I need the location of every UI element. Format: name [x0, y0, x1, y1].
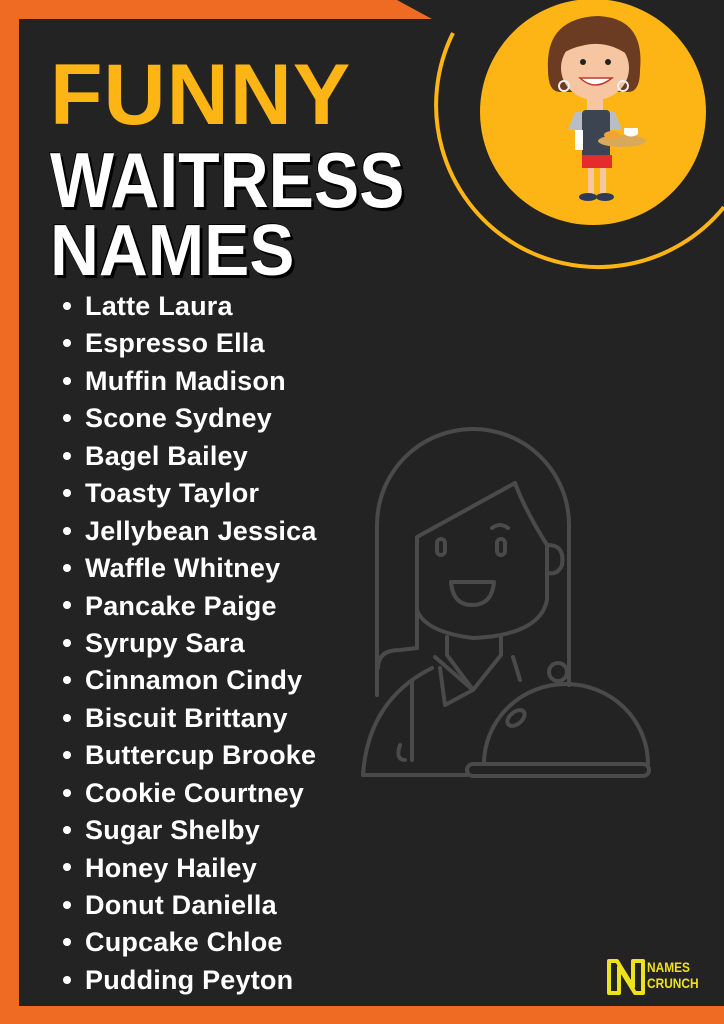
name list: Pancake Paige — [85, 590, 277, 620]
name list: Cinnamon Cindy — [85, 665, 302, 695]
name list: Buttercup Brooke — [85, 740, 316, 770]
icon: waitress cartoon — [548, 16, 646, 201]
name list: Honey Hailey — [85, 853, 257, 883]
name list — [63, 291, 317, 995]
name list: Muffin Madison — [85, 366, 286, 396]
name list: Syrupy Sara — [85, 628, 245, 658]
name list: Espresso Ella — [85, 328, 265, 358]
text: NAMES — [50, 211, 294, 291]
name list: Bagel Bailey — [85, 441, 248, 471]
name list: Cookie Courtney — [85, 778, 304, 808]
logo: names crunch: CRUNCH — [647, 975, 699, 991]
text: WAITRESS — [50, 136, 404, 224]
decorative ring and portrait circle — [434, 0, 724, 270]
name list: Jellybean Jessica — [85, 516, 317, 546]
name list: Scone Sydney — [85, 403, 272, 433]
name list: Latte Laura — [85, 291, 233, 321]
logo: names crunch: NAMES — [647, 959, 690, 975]
name list: Biscuit Brittany — [85, 703, 288, 733]
text: FUNNY — [50, 47, 351, 143]
logo: names crunch — [607, 959, 699, 995]
name list: Donut Daniella — [85, 890, 277, 920]
name list: Cupcake Chloe — [85, 927, 283, 957]
title — [49, 47, 404, 291]
name list: Pudding Peyton — [85, 965, 293, 995]
name list: Sugar Shelby — [85, 815, 260, 845]
name list: Waffle Whitney — [85, 553, 280, 583]
name list: Toasty Taylor — [85, 478, 259, 508]
